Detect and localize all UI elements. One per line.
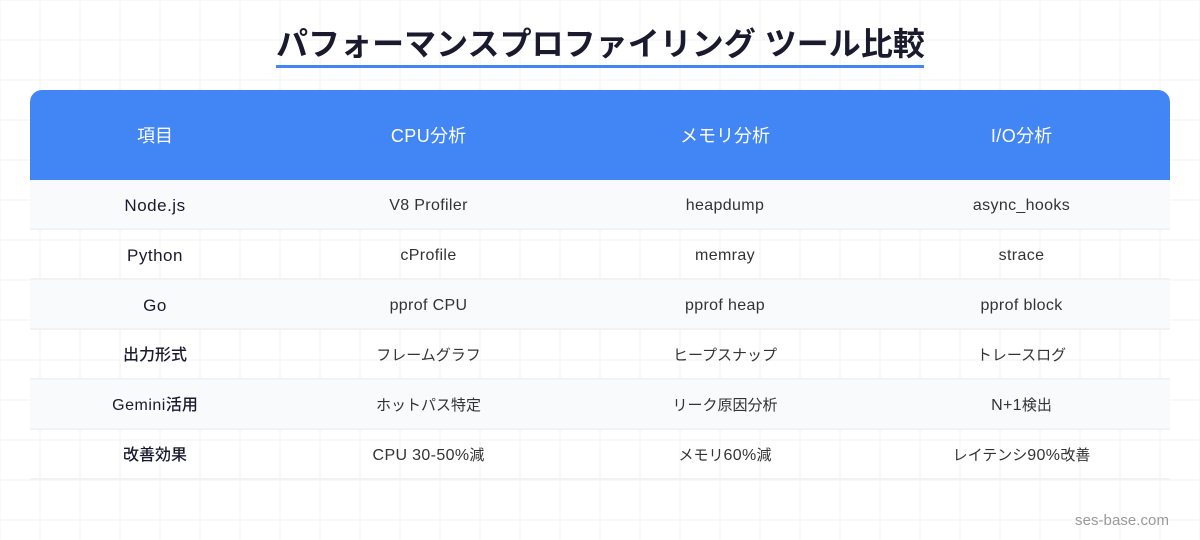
row: Go: Go: [143, 296, 167, 315]
row: Python: cProfile: [400, 247, 457, 264]
row: improvement effect: 改善効果: [123, 447, 187, 464]
row: improvement effect: [30, 430, 1170, 480]
table header row: [30, 90, 1170, 180]
row: Python: memray: [695, 247, 755, 264]
row: Python: strace: [999, 247, 1044, 264]
row: Go: pprof heap: [685, 297, 765, 314]
table header row: I/O分析: [991, 126, 1052, 146]
row: Gemini usage: リーク原因分析: [672, 397, 778, 414]
row: Node.js: V8 Profiler: [389, 197, 468, 214]
row: Node.js: Node.js: [124, 196, 186, 215]
row: Go: pprof CPU: [390, 297, 467, 314]
row: improvement effect: レイテンシ90%改善: [953, 447, 1090, 464]
title: パフォーマンスプロファイリング ツール比較: [276, 26, 925, 62]
row: Go: pprof block: [980, 297, 1063, 314]
row: improvement effect: CPU 30-50%減: [373, 447, 484, 464]
footer site credit: ses-base.com: [1075, 512, 1169, 529]
row: Go: [30, 280, 1170, 330]
row: Node.js: async_hooks: [973, 197, 1070, 214]
row: Gemini usage: ホットパス特定: [376, 397, 481, 414]
row: Gemini usage: N+1検出: [991, 397, 1052, 414]
row: Python: [30, 230, 1170, 280]
row: output format: [30, 330, 1170, 380]
row: Gemini usage: Gemini活用: [112, 397, 198, 414]
row: Node.js: [30, 180, 1170, 230]
row: output format: 出力形式: [123, 347, 187, 364]
row: Python: Python: [127, 246, 183, 265]
comparison table: [30, 90, 1170, 479]
row: improvement effect: メモリ60%減: [678, 447, 772, 464]
table header row: メモリ分析: [680, 126, 770, 146]
row: output format: トレースログ: [977, 347, 1066, 364]
table header row: 項目: [137, 126, 173, 146]
table header row: CPU分析: [391, 126, 466, 146]
row: output format: ヒープスナップ: [673, 347, 777, 364]
row: output format: フレームグラフ: [376, 347, 481, 364]
row: Gemini usage: [30, 380, 1170, 430]
row: Node.js: heapdump: [686, 197, 764, 214]
